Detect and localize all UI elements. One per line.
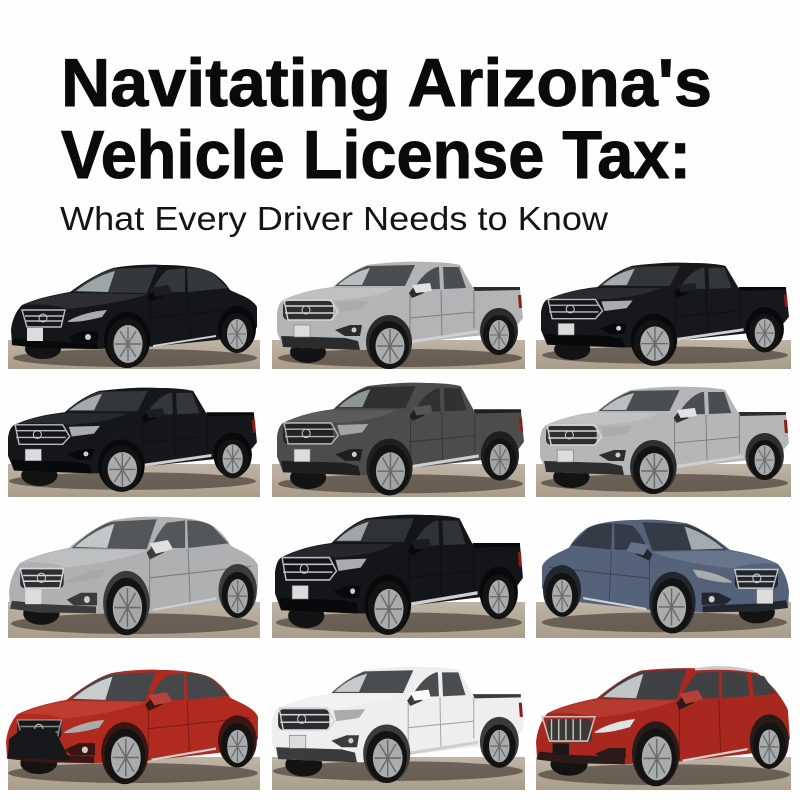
vehicle: black pickup truck, row 3	[272, 515, 525, 638]
vehicle: black sedan	[8, 265, 260, 369]
vehicle: grey pickup truck	[272, 383, 525, 497]
title: Vehicle License Tax:	[61, 117, 691, 193]
title	[61, 45, 712, 193]
vehicle: silver sedan	[8, 517, 260, 638]
title: Navitating Arizona's	[61, 45, 712, 121]
red sedan front grille	[8, 729, 70, 760]
vehicle: white pickup truck	[272, 667, 525, 790]
vehicle: silver pickup truck	[272, 262, 525, 369]
vehicle: red sedan	[6, 670, 260, 790]
vehicle: silver pickup truck, row 2	[536, 387, 791, 497]
subtitle: What Every Driver Needs to Know	[60, 201, 609, 238]
vehicle: black pickup truck	[536, 263, 791, 369]
vehicle: black pickup truck, row 2	[8, 388, 260, 497]
vehicle: blue-grey sedan facing right	[536, 520, 791, 638]
vehicle: red SUV	[536, 666, 791, 790]
